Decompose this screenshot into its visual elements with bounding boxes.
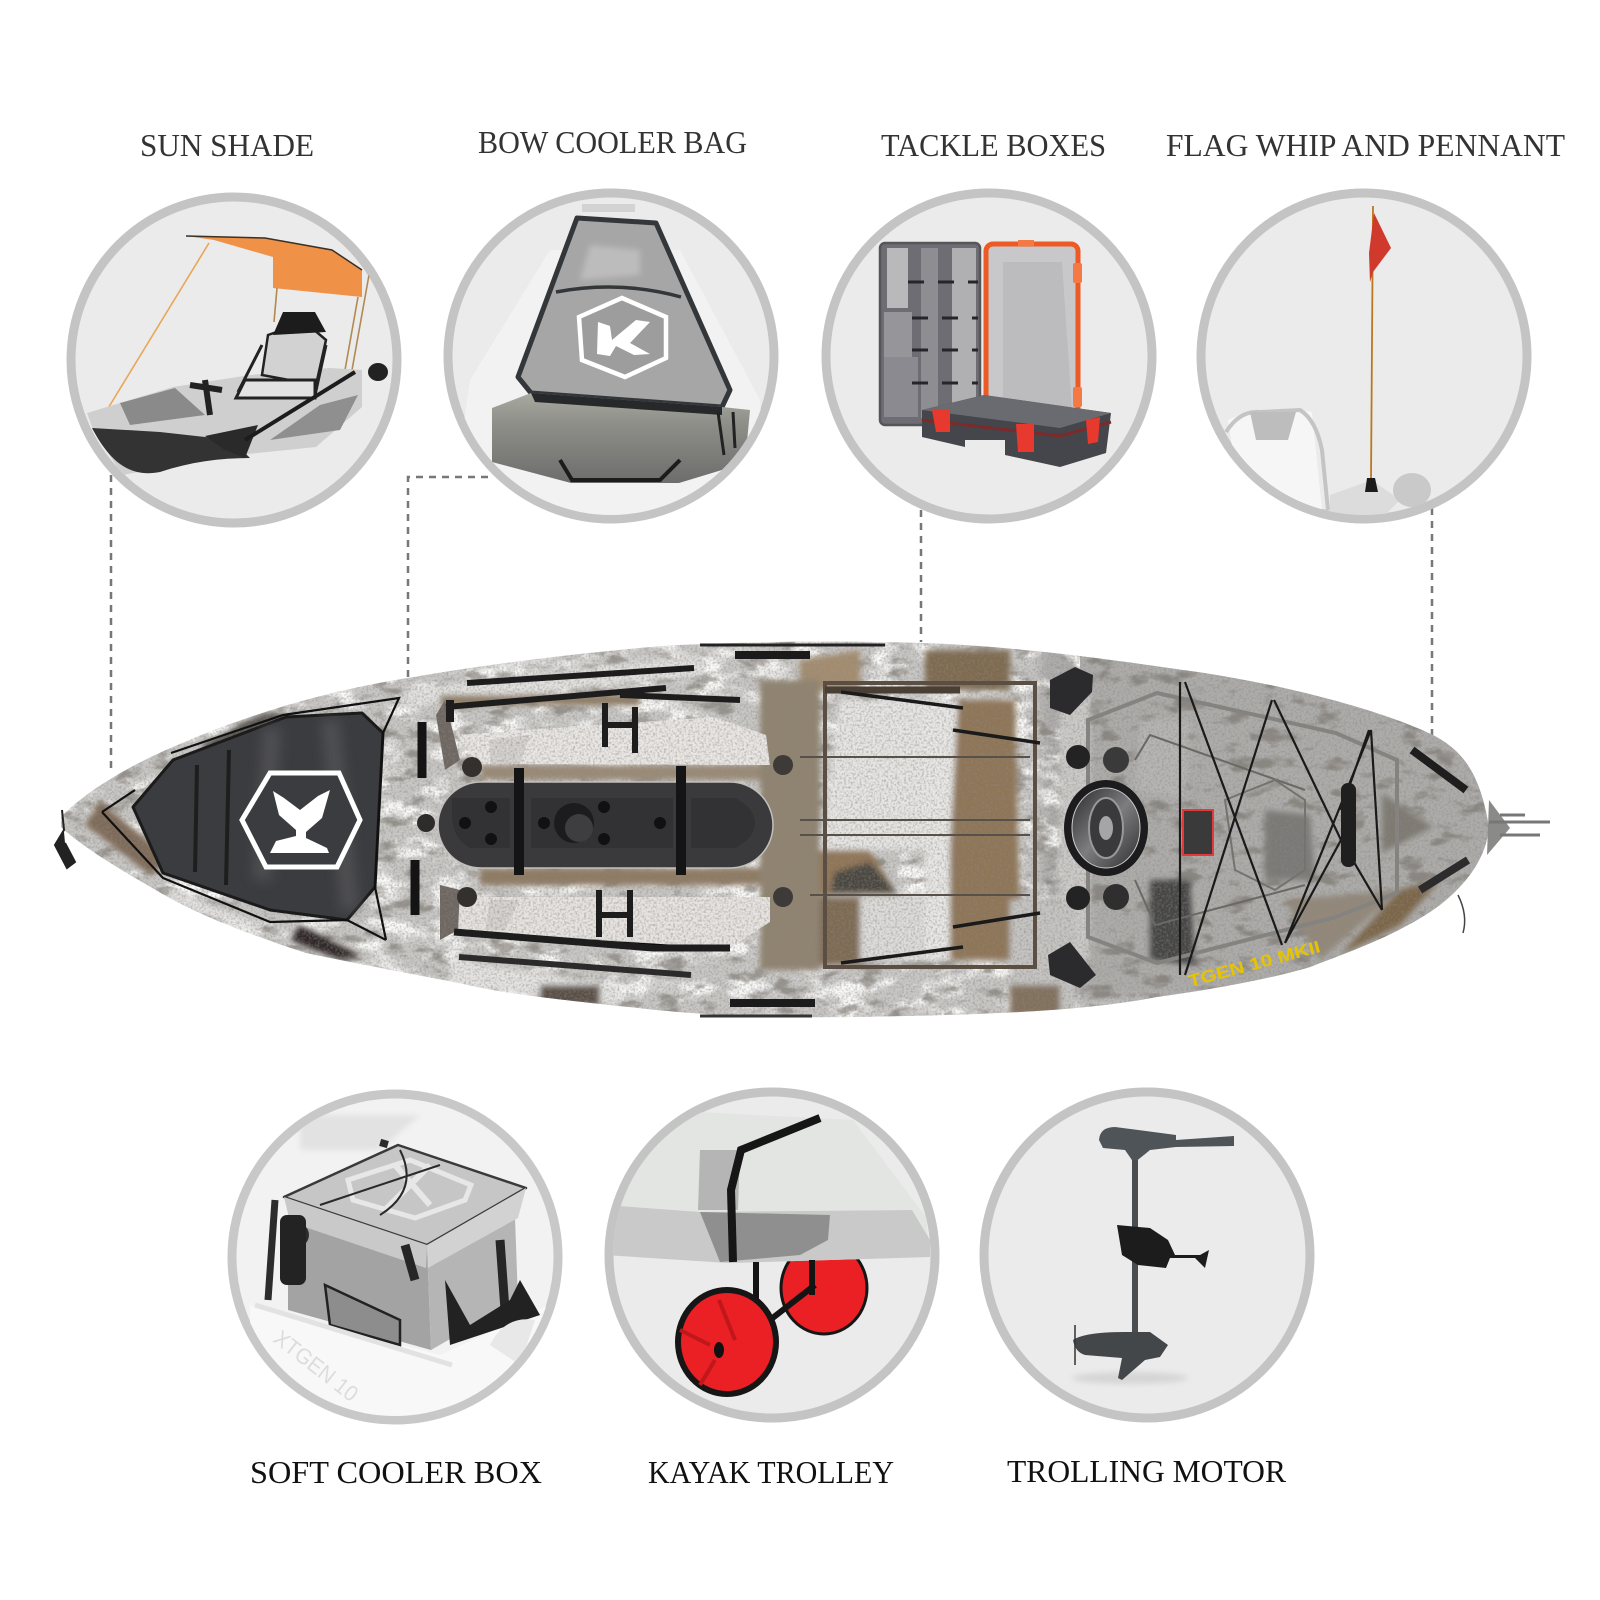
cockpit recesses: [436, 700, 770, 948]
watermark model name: XTGEN 10: [269, 1325, 363, 1407]
icon: flag and pole: [1365, 206, 1391, 492]
rear compartment frame: [800, 683, 1397, 967]
camouflage blotches: [85, 650, 1440, 1015]
icon: rear wheel: [780, 1259, 868, 1336]
panel: tackle boxes: [826, 193, 1152, 519]
stern hardware: [1458, 800, 1550, 933]
panel: trolling motor: [984, 1092, 1310, 1418]
hatch cover: [1064, 780, 1148, 876]
heading: flag whip and pennant: FLAG WHIP AND PENNANT: [1166, 127, 1565, 163]
icon: ghosted seat: [1226, 410, 1431, 515]
icon: axle and front wheel: [678, 1260, 815, 1394]
bow toggle handle: [55, 810, 75, 868]
connector: tackle boxes to kayak: [920, 510, 922, 642]
heading: kayak trolley: KAYAK TROLLEY: [648, 1454, 894, 1490]
icon: base box: [922, 395, 1111, 467]
icon: trolling motor: [1073, 1127, 1234, 1380]
bow bag: [102, 698, 399, 940]
icon: cooler bag: [268, 1140, 540, 1365]
icon: kayak hull: [605, 1112, 930, 1263]
panel: flag whip and pennant: [1201, 193, 1527, 519]
icon: orange canopy: [107, 236, 369, 410]
rails and paddle clips: [415, 645, 885, 1016]
panel: bow cooler bag: [448, 193, 774, 520]
side fittings and pads: [1048, 667, 1468, 988]
connector: flag whip to kayak: [1431, 508, 1433, 735]
connector: sun shade to bow: [110, 475, 112, 768]
icon: hexagon whale-tail logo: [242, 773, 360, 867]
connector: bow cooler bag to bow: [408, 477, 488, 680]
panel: kayak trolley: [605, 1092, 935, 1418]
camouflage patches: [61, 642, 1080, 1017]
mount plate: [438, 766, 773, 875]
heading: tackle boxes: TACKLE BOXES: [881, 127, 1106, 163]
icon: orange lid: [986, 240, 1082, 414]
panel: sun shade: [71, 197, 397, 523]
heading: trolling motor: TROLLING MOTOR: [1007, 1453, 1287, 1489]
icon: kayak with seat: [87, 312, 388, 475]
heading: bow cooler bag: BOW COOLER BAG: [478, 124, 747, 160]
icon: mesh bag top: [518, 218, 730, 407]
grain overlay: [61, 642, 1488, 1018]
model name on hull: TGEN 10 MKII: [1186, 937, 1322, 991]
icon: cooler bag body: [492, 393, 750, 483]
icon: open tray: [880, 243, 980, 425]
infographic: kayak accessories: [54, 132, 1564, 1484]
panel: soft cooler box: [232, 1094, 560, 1430]
bungee and fittings on rear section: [841, 682, 1382, 975]
heading: soft cooler box: SOFT COOLER BOX: [250, 1454, 542, 1490]
bungee cord: [102, 698, 399, 940]
heading: sun shade: SUN SHADE: [140, 127, 314, 163]
main kayak top view: [40, 620, 1550, 1030]
